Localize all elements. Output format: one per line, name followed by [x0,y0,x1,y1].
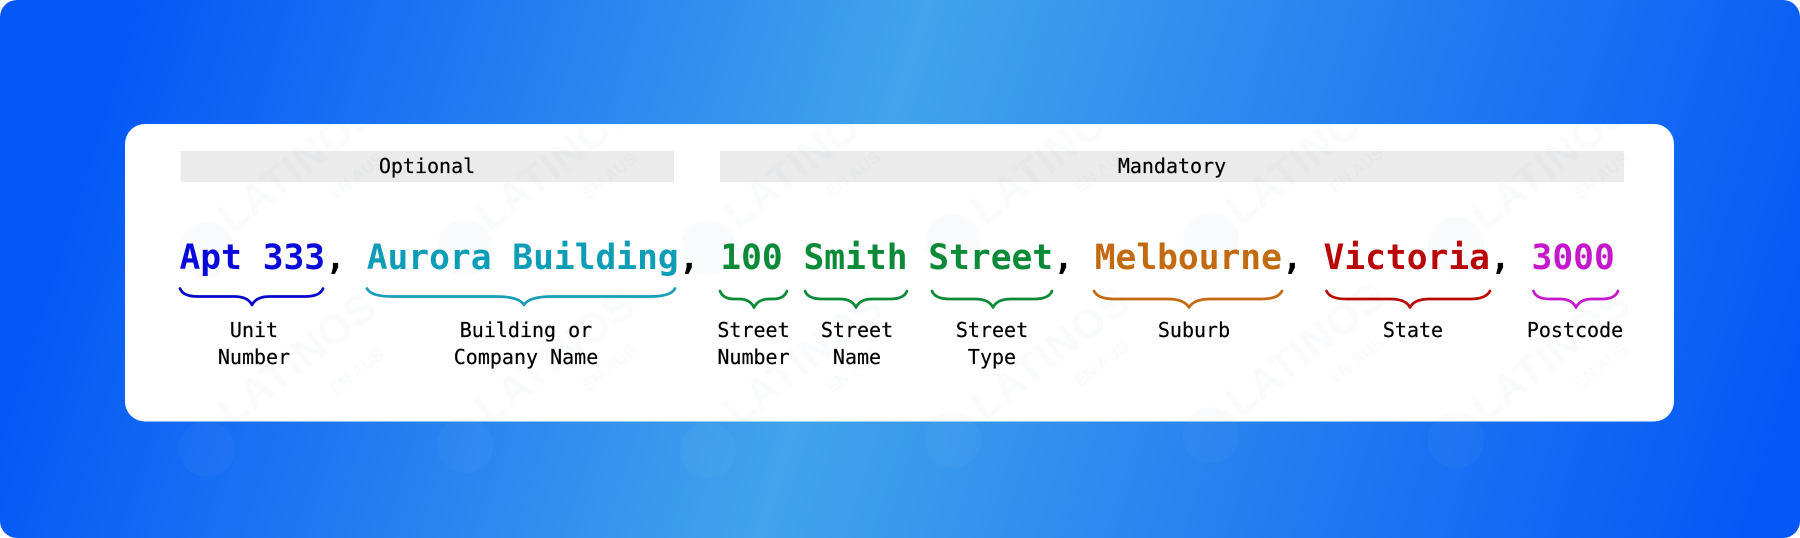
brace: state [1326,291,1490,308]
watermark on panel: LATINOS [962,276,1139,429]
label: state: State [1383,318,1443,342]
optional header bar [180,151,674,182]
watermark on panel: EN AUS [1571,339,1633,393]
watermark on panel: EN AUS [823,147,885,201]
label: street type: Street [956,318,1028,342]
brace: street type [932,291,1052,308]
watermark on panel: EN AUS [326,345,388,399]
label: street number: Number [717,345,790,369]
watermark on panel: EN AUS [579,149,641,203]
watermark on panel: LATINOS [1462,86,1639,239]
watermark globes on background [179,407,1484,478]
watermark on panel: LATINOS [962,80,1139,233]
optional header bar: Optional [379,154,475,178]
label: street number [717,318,790,369]
label: building or company name: Company Name [454,345,598,369]
label: street name: Name [833,345,881,369]
brace: unit number [180,288,323,305]
watermark on panel: EN AUS [326,149,388,203]
label: suburb: Suburb [1158,318,1230,342]
watermark on panel: LATINOS [467,86,644,239]
brace: street name [805,291,907,308]
label: unit number [218,318,290,369]
address line: Apt 333, Aurora Building, 100 Smith Street, Melbourne, Victoria, 3000 [180,238,1615,278]
brace: street number [720,291,787,308]
watermark on panel: LATINOS [715,282,892,435]
watermark on panel: EN AUS [823,343,885,397]
watermark on panel: LATINOS [1217,272,1394,425]
label: building or company name [454,318,598,369]
watermark on panel: LATINOS [467,280,644,433]
label: building or company name: Building or [460,318,592,342]
watermark on panel: EN AUS [1571,149,1633,203]
mandatory header bar [720,151,1624,182]
label: street number: Street [717,318,790,342]
watermark on panel: EN AUS [1071,337,1133,391]
watermark on panel: LATINOS [1217,80,1394,233]
label: street name [821,318,893,369]
label: postcode: Postcode [1527,318,1623,342]
label: street type [956,318,1028,369]
watermark on panel: EN AUS [1326,333,1388,387]
watermark on panel: LATINOS [209,282,386,435]
watermark on panel [252,288,1620,309]
watermark on panel: EN AUS [579,341,641,395]
white panel [125,124,1674,422]
label: street type: Type [968,345,1016,369]
brace: suburb [1094,291,1282,308]
brace: postcode [1534,291,1618,308]
label: unit number: Unit [230,318,278,342]
label: street name: Street [821,318,893,342]
watermark on panel: EN AUS [1326,143,1388,197]
watermark on panel: EN AUS [1071,143,1133,197]
watermark on panel: LATINOS [1462,278,1639,431]
brace: building or company name [367,288,675,305]
watermark on panel: LATINOS [209,88,386,241]
mandatory header bar: Mandatory [1118,154,1226,178]
watermark on panel: LATINOS [715,84,892,237]
label: unit number: Number [218,345,290,369]
